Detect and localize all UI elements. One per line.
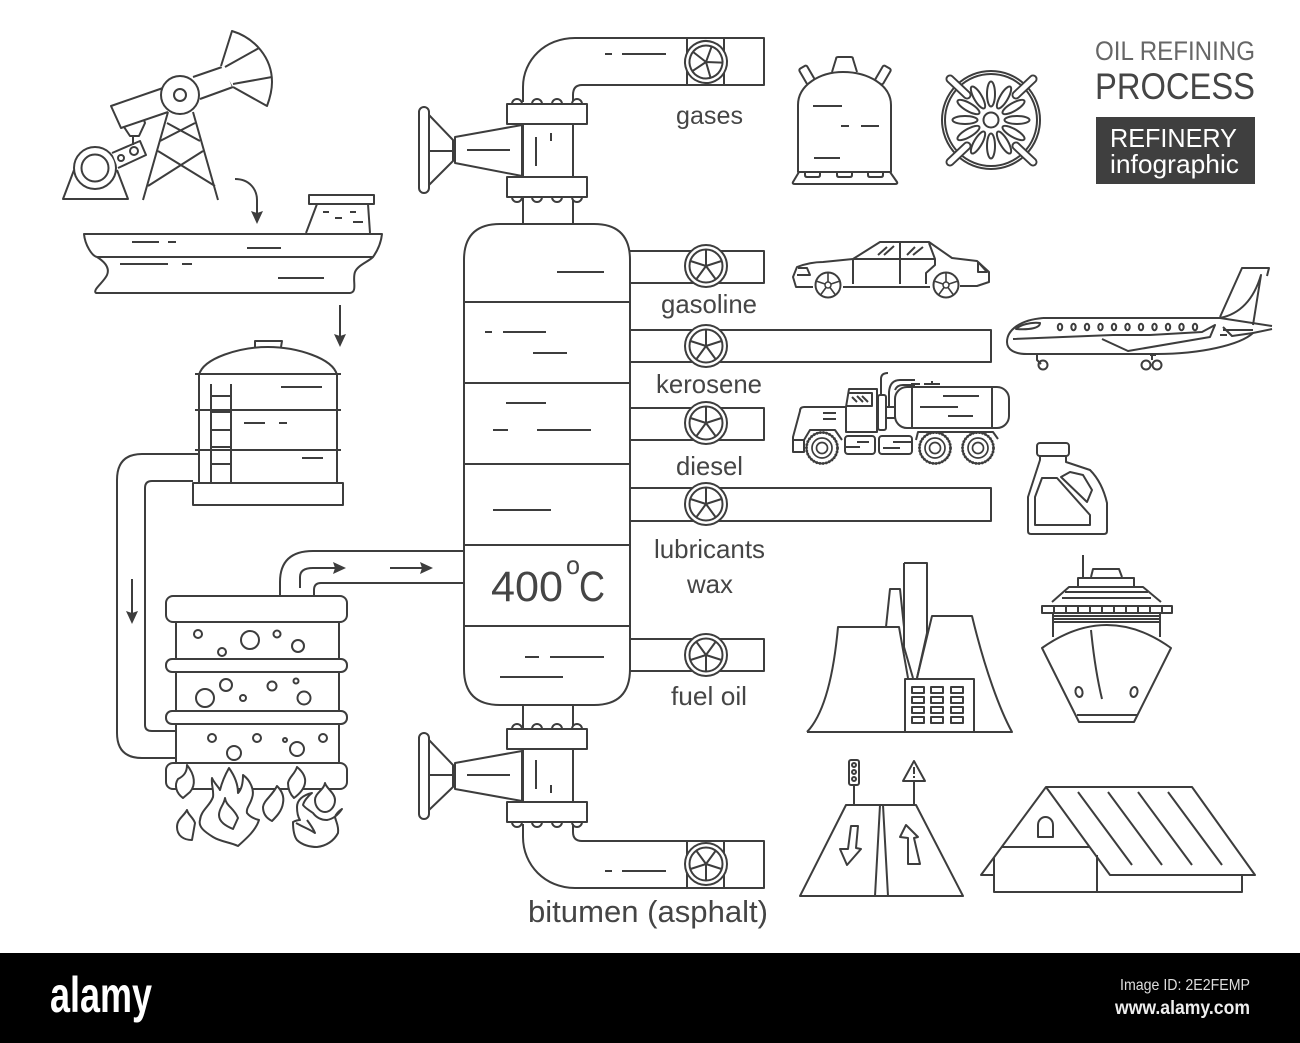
label: kerosene: kerosene [656,369,762,399]
icon: cruise ship [1042,555,1172,722]
valve: kerosene [685,325,727,367]
valve: gases [679,35,733,89]
valve: fuel oil [685,634,727,676]
icon: road [800,760,963,896]
pipe: bottom neck with flanges and nozzle [419,705,587,827]
valve: diesel [685,402,727,444]
temperature degree mark: o [566,550,580,580]
pipe: furnace to column [280,551,464,596]
label: gases: gases [676,102,743,130]
label: bitumen (asphalt): bitumen (asphalt) [528,894,768,929]
pipe: storage tank to furnace [117,454,199,758]
badge: refinery infographic: infographic [1110,149,1239,179]
valve: bitumen [685,843,727,885]
arrow: tanker to storage tank [334,305,346,347]
arrow: tank to furnace [126,579,138,624]
label: gasoline: gasoline [661,289,757,319]
logo: alamy: alamy [50,967,152,1023]
label: wax: wax [686,569,733,599]
label: lubricants: lubricants [654,534,765,564]
temperature unit: C [579,563,605,611]
icon: power plant [807,563,1012,732]
pipe: kerosene [630,330,991,362]
pipe: lubricants and wax [630,488,991,521]
arrows: flow into column [300,562,433,588]
distillation column [464,224,630,705]
website: www.alamy.com [1114,998,1250,1019]
label: diesel: diesel [676,451,743,481]
label: fuel oil: fuel oil [671,681,747,711]
icon: lubricant bottle [1028,443,1107,534]
icon: gas valve wheel [942,71,1040,169]
pipe: bitumen outlet [523,824,764,888]
image id: Image ID: 2E2FEMP [1120,977,1250,994]
pipe: fuel oil [628,639,764,671]
icon: oil tanker ship [84,195,382,293]
pipe: diesel [630,408,764,440]
icon: storage tank [193,341,343,505]
icon: car [793,242,989,298]
valve: gasoline [685,245,727,287]
title: process: PROCESS [1095,66,1255,107]
icon: gas tank [793,57,897,184]
pipe: top neck with flanges and nozzle [419,99,587,224]
pipe: gases outlet [523,38,764,102]
icon: house [981,787,1255,892]
valve: lubricants [685,483,727,525]
footer bar [0,953,1300,1043]
arrow: pump to tanker [235,179,263,224]
badge: refinery infographic [1096,117,1255,184]
icon: flames [176,765,342,847]
pipe: gasoline [628,251,764,283]
title: oil refining: OIL REFINING [1095,36,1255,66]
icon: furnace with bubbles [166,596,347,789]
temperature label: 400 [491,563,563,611]
badge: refinery infographic: REFINERY [1110,123,1237,153]
icon: oil pump jack [63,31,272,200]
icon: airplane [1007,268,1272,370]
icon: tanker truck [793,373,1009,464]
